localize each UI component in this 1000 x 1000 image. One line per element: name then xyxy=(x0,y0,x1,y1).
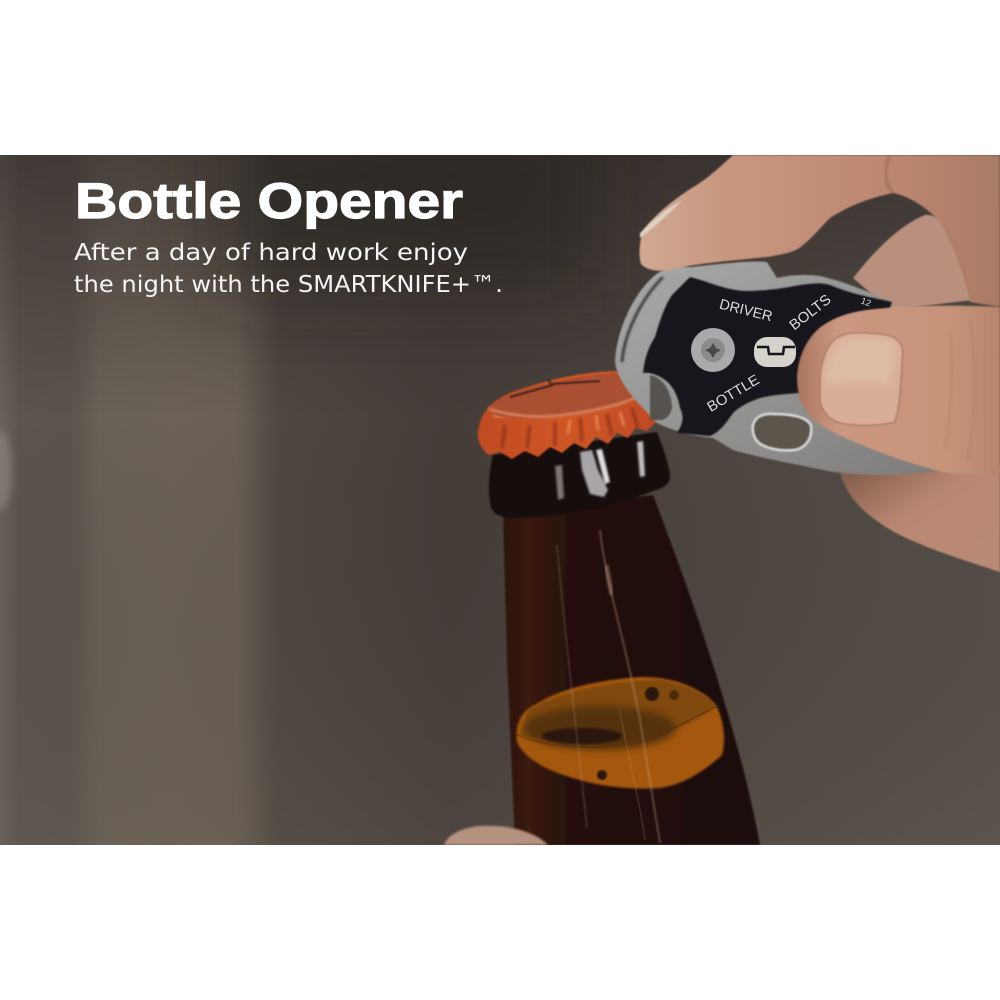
subtitle: After a day of hard work enjoy xyxy=(74,240,468,266)
photo background xyxy=(0,110,1000,845)
neck highlights xyxy=(555,441,645,500)
bubbles xyxy=(597,687,679,780)
thumbnail xyxy=(820,333,903,425)
finger crease xyxy=(885,155,893,193)
steel body xyxy=(615,261,945,475)
bottle neck xyxy=(489,432,670,518)
hand at bottom xyxy=(444,826,548,845)
beer bottle xyxy=(478,371,760,845)
tool labels: DRIVER xyxy=(718,297,774,325)
tool labels: 12 xyxy=(860,296,872,308)
multi tool xyxy=(615,261,945,475)
glass reflections xyxy=(557,530,660,843)
skirt highlights xyxy=(493,412,624,434)
cap top xyxy=(487,374,634,419)
back fingers xyxy=(840,215,1000,572)
middle finger xyxy=(853,215,972,310)
beer level in bottle xyxy=(515,677,724,789)
screw xyxy=(691,328,735,372)
tool labels: BOLTS xyxy=(787,292,834,334)
bottle body xyxy=(503,495,760,845)
tool labels xyxy=(705,292,872,416)
logo xyxy=(754,337,796,367)
index finger xyxy=(640,155,1000,307)
subtitle xyxy=(74,240,503,298)
black plate xyxy=(643,277,892,436)
skirt crimp shadows xyxy=(502,408,638,448)
cap skirt xyxy=(478,371,658,459)
bottle notch xyxy=(650,375,672,420)
fingernail edge xyxy=(640,200,682,238)
title: Bottle Opener xyxy=(75,173,463,229)
nail highlight xyxy=(826,338,894,385)
subtitle: the night with the SMARTKNIFE+™. xyxy=(74,272,503,298)
tool labels: BOTTLE xyxy=(705,372,763,416)
rim groove xyxy=(622,277,663,362)
thumb xyxy=(797,306,1000,476)
bottle cap xyxy=(478,371,658,459)
knuckle creases xyxy=(945,320,975,460)
lower finger xyxy=(840,465,1000,572)
keyring hole xyxy=(753,414,811,451)
